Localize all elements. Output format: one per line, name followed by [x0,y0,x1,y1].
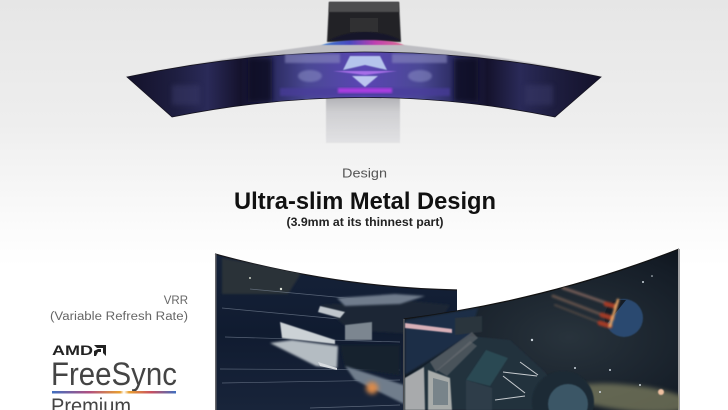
mid spaceship block [345,322,372,340]
AMD FreeSync Premium logo [51,343,177,410]
monitor silver rim [125,45,603,77]
AMD wordmark: AMD [52,343,93,358]
stand colour ring [330,32,400,40]
VRR label [50,295,188,323]
subheading: (3.9mm at its thinnest part) [286,217,444,229]
stand lower neck [326,92,400,143]
VRR label: VRR [164,295,188,307]
left lower monitor [215,254,457,410]
planet [605,299,643,337]
upper spaceship hull [324,302,448,334]
spaceship body [404,337,546,410]
engine ring [532,376,594,410]
monitor stand rear block [327,2,401,42]
truss struts [495,362,538,400]
engine glow [366,382,378,394]
meteor trails [553,288,618,326]
right lower monitor [403,249,693,410]
motion streaks [220,289,410,408]
teal panel [466,350,508,386]
colour bar [52,391,176,394]
screen artwork [172,54,553,105]
galaxy dust [587,381,679,410]
dark grille plate [437,341,477,376]
pink ship edge [405,323,452,333]
blue upper-left area [405,308,478,375]
stars [531,275,653,393]
section label: Design: Design [342,166,387,180]
top monitor illustration [125,2,603,143]
VRR label: (Variable Refresh Rate) [50,311,188,323]
white spaceship wing [280,322,335,344]
heading: Ultra-slim Metal Design [234,188,496,215]
starfield patch [222,258,302,294]
curved monitor screen [127,52,601,117]
AMD arrow mark [94,345,106,356]
hex hull panels [405,367,425,410]
FreeSync wordmark: FreeSync [51,356,177,392]
